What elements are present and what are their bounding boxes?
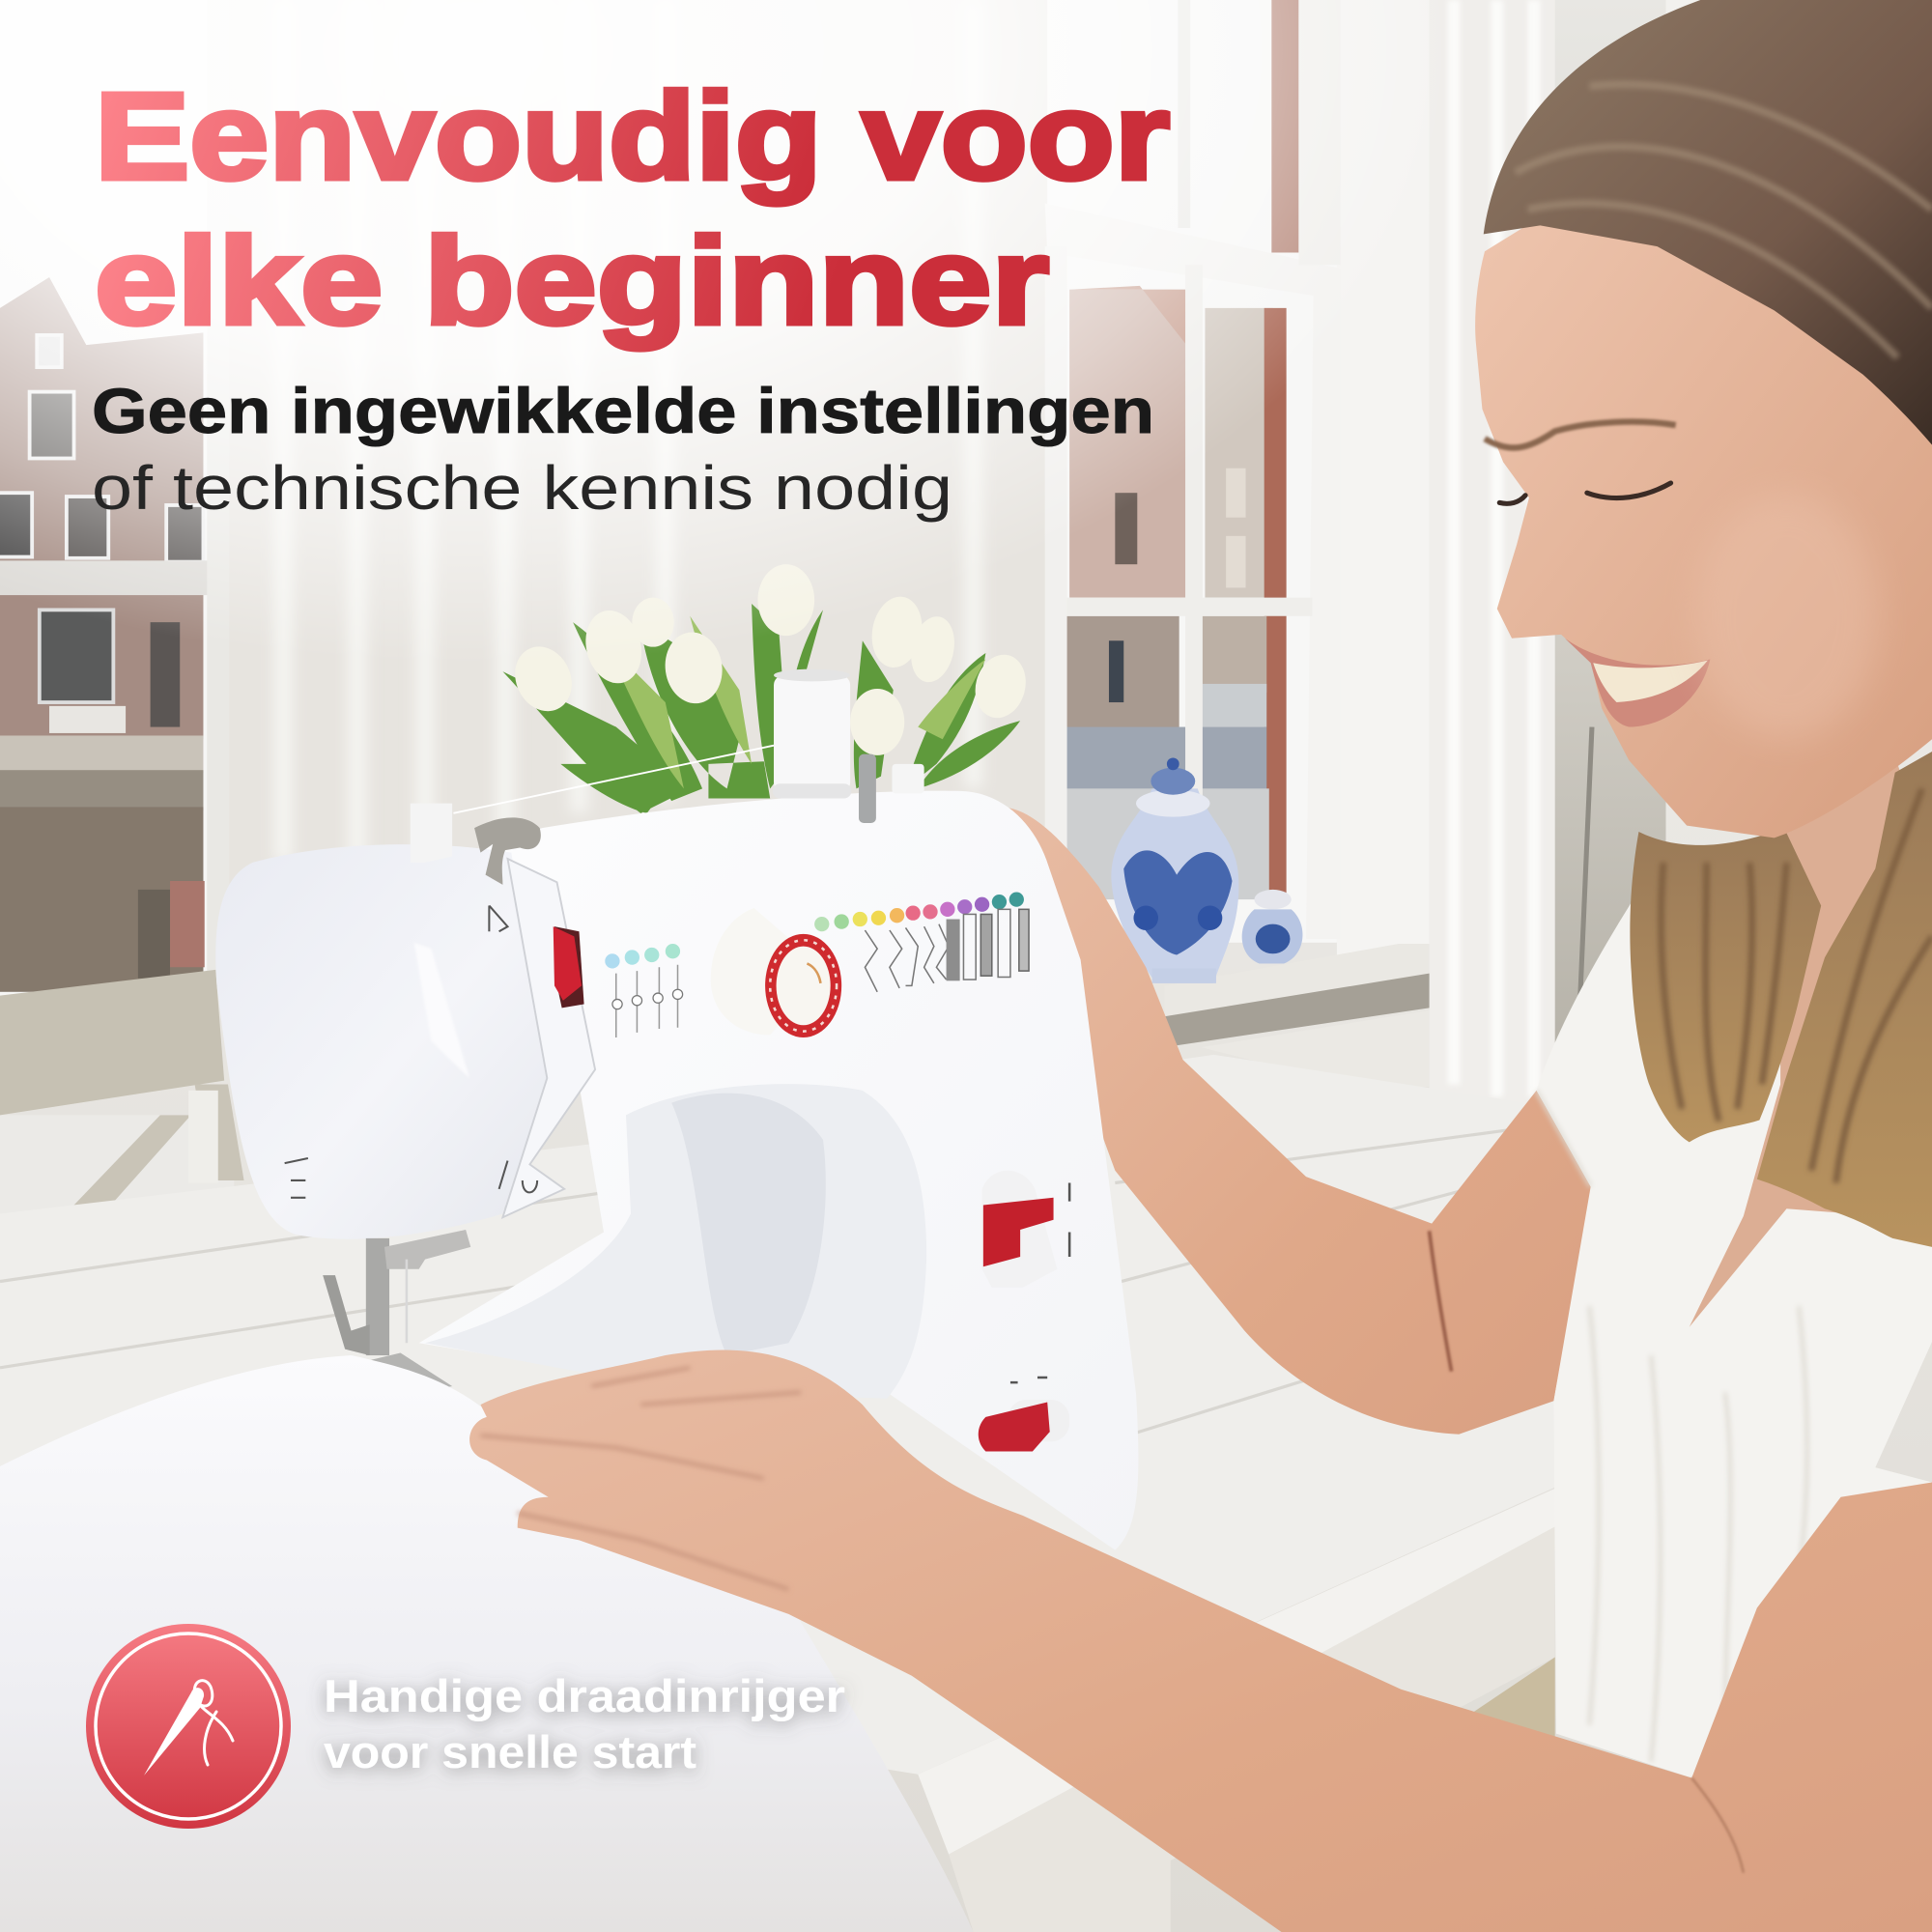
woman's hair lock right: [1757, 752, 1932, 1247]
callout line 1: Handige draadinrijger: [324, 1670, 845, 1721]
metal pin: [859, 754, 876, 823]
presser foot and needle: [323, 1230, 470, 1392]
thread tension guide: [605, 944, 683, 1037]
window sill and radiator: [1164, 944, 1430, 1087]
table top: [0, 1055, 1602, 1932]
subtitle light line: of technische kennis nodig: [92, 453, 952, 523]
tulip bouquet: [502, 564, 1033, 813]
callout line 2: voor snelle start: [324, 1726, 696, 1777]
subtitle: [92, 375, 1154, 523]
arm crease: [1691, 1778, 1744, 1873]
vase: large delft blue: [1111, 757, 1238, 983]
woman's shirt: [1537, 881, 1932, 1778]
thread spool: [773, 669, 851, 799]
face plate strip: [502, 859, 595, 1217]
eyes: [1499, 483, 1671, 503]
thread line: [453, 746, 774, 813]
callout text: [324, 1670, 845, 1777]
woman's forearm and resting hand: [469, 1350, 1932, 1932]
tension dial: [711, 908, 841, 1037]
icon: needle and thread badge: [86, 1624, 291, 1829]
title: [95, 68, 1170, 351]
white post: [892, 764, 924, 793]
white wash over top of photo: [0, 0, 1932, 863]
finger creases: [480, 1368, 801, 1589]
arch inner wall: [671, 1094, 826, 1355]
woman's raised arm and hand behind machine: [1001, 807, 1592, 1435]
stitch dots row: [814, 892, 1024, 931]
title line 2: elke beginner: [95, 213, 1049, 351]
white fabric: [0, 1355, 974, 1932]
sewing machine: [215, 669, 1138, 1550]
right window with street view: [1045, 0, 1341, 943]
arch opening: [425, 1084, 926, 1399]
chair back: [0, 970, 244, 1226]
elbow crease: [1430, 1231, 1452, 1372]
hair strands: [1516, 84, 1932, 357]
woman's neck and chest: [1690, 764, 1932, 1327]
cheek shading: [1694, 493, 1879, 739]
eyebrow near: [1485, 422, 1676, 448]
subtitle bold line: Geen ingewikkelde instellingen: [92, 375, 1154, 446]
machine body: [419, 791, 1138, 1550]
woman's hair top: [1484, 0, 1932, 444]
woman's hair lock left: [1630, 828, 1821, 1142]
head symbols: [285, 905, 537, 1198]
red hand wheel: [554, 926, 584, 1008]
title line 1: Eenvoudig voor: [95, 68, 1170, 206]
left window with canal houses: [0, 0, 229, 998]
red reverse switch: [979, 1400, 1069, 1452]
machine head cover: [215, 844, 547, 1239]
thread guide: [474, 817, 541, 885]
head highlight: [414, 943, 469, 1078]
smile: [1565, 639, 1710, 727]
thread spindle: [411, 804, 452, 863]
red stitch lever: [982, 1171, 1057, 1288]
dial markers: [1010, 1182, 1069, 1382]
vase: small delft blue: [1242, 890, 1302, 963]
stitch patterns: [865, 909, 1029, 992]
woman's face: [1475, 210, 1932, 838]
